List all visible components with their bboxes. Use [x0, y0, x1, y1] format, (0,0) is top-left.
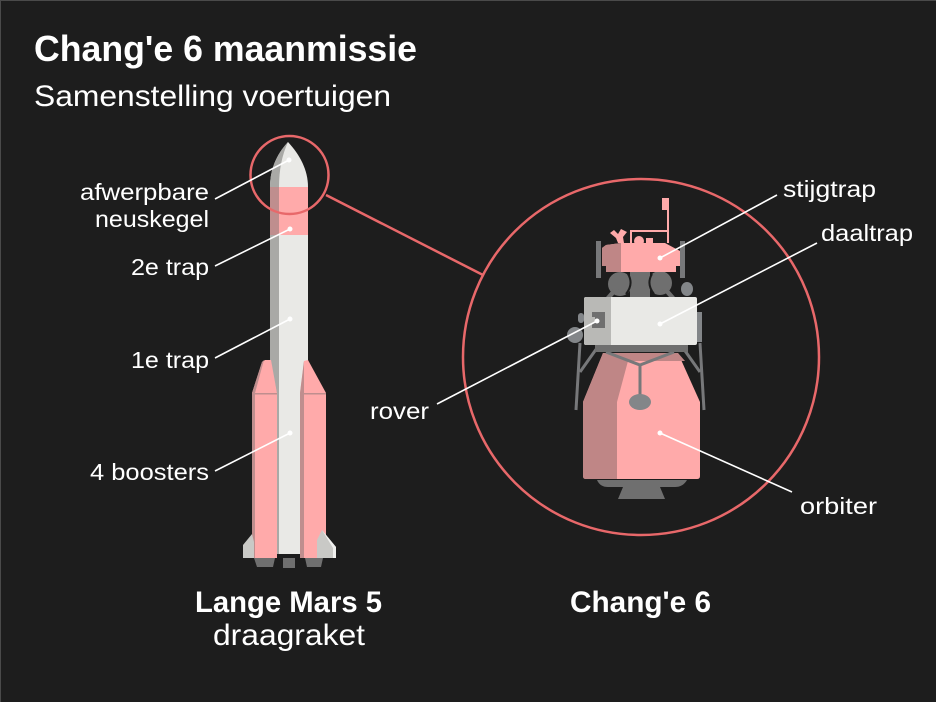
title: Chang'e 6 maanmissie: [34, 28, 417, 69]
orbiter struts and tank: [606, 352, 674, 410]
label: 2e trap: 2e trap: [131, 254, 209, 280]
rover: [592, 312, 605, 328]
label: afwerpbare neuskegel: neuskegel: [95, 206, 209, 232]
second stage: [279, 187, 308, 235]
tank outlines: [626, 274, 654, 294]
label: stijgtrap: stijgtrap: [783, 176, 876, 202]
caption: Lange Mars 5 draagraket: draagraket: [213, 619, 366, 652]
side tanks: [567, 282, 702, 343]
label: afwerpbare neuskegel: [80, 179, 209, 232]
caption: Lange Mars 5 draagraket: Lange Mars 5: [195, 586, 382, 619]
subtitle: Samenstelling voertuigen: [34, 80, 391, 113]
orbiter shadow: [583, 353, 685, 479]
magnifier circles: [250, 136, 819, 535]
caption: Chang'e 6: Chang'e 6: [570, 586, 711, 619]
label: rover: rover: [370, 398, 429, 424]
ascent side panels: [596, 241, 685, 278]
left booster: [252, 360, 277, 558]
label: orbiter: orbiter: [800, 493, 877, 519]
spacecraft: Chang'e 6: [567, 198, 704, 499]
label: daaltrap: daaltrap: [821, 220, 913, 246]
caption: Lange Mars 5 draagraket: [195, 586, 382, 652]
descent stage: [584, 297, 697, 345]
orbiter: [583, 353, 700, 479]
orbiter nozzle: [597, 480, 687, 499]
fins: [243, 534, 254, 558]
connecting structure and tanks: [595, 270, 688, 352]
right booster: [300, 360, 326, 558]
descent stage shadow: [584, 297, 611, 345]
ascent stage shadow: [602, 243, 621, 272]
engines: [254, 558, 323, 568]
second stage shadow: [270, 187, 279, 235]
core stage shadow: [270, 142, 288, 554]
label: 4 boosters: 4 boosters: [90, 459, 209, 485]
label: afwerpbare neuskegel: afwerpbare: [80, 179, 209, 205]
rocket: Lange Mars 5: [243, 142, 336, 568]
label: 1e trap: 1e trap: [131, 347, 209, 373]
core stage: [270, 142, 308, 554]
flag and antenna: [610, 198, 669, 246]
landing legs: [576, 343, 704, 410]
leader lines: [215, 158, 817, 492]
ascent stage: [602, 243, 680, 272]
